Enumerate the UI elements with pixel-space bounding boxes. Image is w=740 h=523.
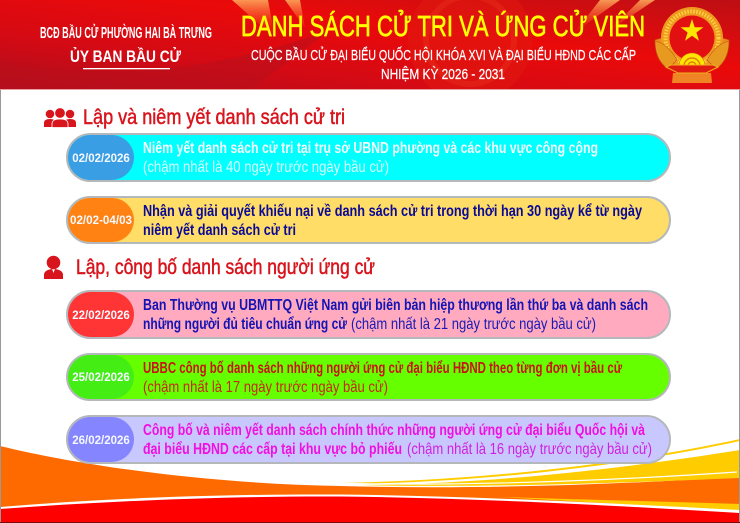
event: 02/02/2026: (chậm nhất là 40 ngày trước ngày bầu cử)	[143, 159, 389, 176]
event: 22/02/2026: những người đủ tiêu chuẩn ứng cử	[143, 315, 347, 333]
event: 02/02-04/03: niêm yết danh sách cử tri	[143, 222, 296, 239]
event: 26/02/2026: (chậm nhất là 16 ngày trước ngày bầu cử)	[407, 441, 652, 458]
footer waves	[0, 439, 740, 523]
event: 26/02/2026: đại biểu HĐND các cấp tại khu vực bỏ phiếu	[143, 440, 402, 458]
event: 25/02/2026	[67, 354, 670, 400]
icon: person	[44, 256, 63, 279]
event: 02/02/2026: Niêm yết danh sách cử tri tại trụ sở UBND phường và các khu vực công cộng	[143, 140, 598, 157]
event: 22/02/2026	[67, 291, 670, 338]
header banner	[0, 0, 740, 90]
heading text: Lập, công bố danh sách người ứng cử	[76, 256, 375, 279]
event: 22/02/2026: (chậm nhất là 21 ngày trước ngày bầu cử)	[351, 316, 596, 333]
event: 25/02/2026: (chậm nhất là 17 ngày trước ngày bầu cử)	[143, 379, 388, 396]
icon: group of people	[44, 108, 76, 128]
event: 26/02/2026: 26/02/2026	[72, 435, 130, 447]
event: 26/02/2026	[67, 416, 670, 463]
event: 02/02-04/03	[67, 197, 670, 243]
subtitle	[251, 46, 636, 83]
event: 22/02/2026: 22/02/2026	[72, 310, 130, 322]
event: 02/02-04/03: 02/02-04/03	[70, 215, 132, 227]
section 2 heading	[44, 256, 375, 279]
heading text: Lập và niêm yết danh sách cử tri	[83, 106, 345, 129]
subtitle: NHIỆM KỲ 2026 - 2031	[381, 66, 505, 83]
event: 02/02/2026	[67, 134, 670, 181]
section 1 heading	[44, 106, 345, 129]
left heading: committee	[40, 23, 212, 69]
left heading: committee: ỦY BAN BẦU CỬ	[70, 47, 182, 66]
event: 02/02/2026: 02/02/2026	[72, 153, 130, 165]
left heading: committee: BCĐ BẦU CỬ PHƯỜNG HAI BÀ TRƯNG	[40, 23, 212, 42]
event: 25/02/2026: 25/02/2026	[72, 372, 130, 384]
icon: national emblem	[655, 7, 729, 83]
